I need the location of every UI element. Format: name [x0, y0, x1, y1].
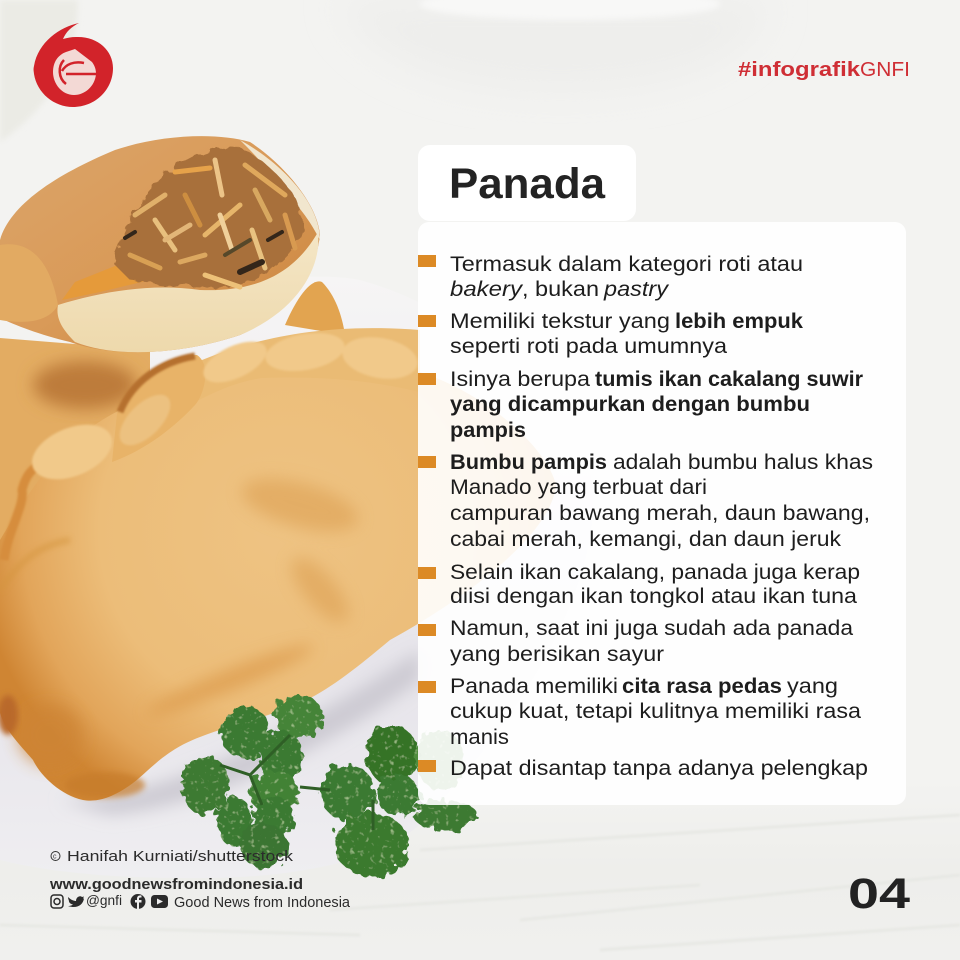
logo — [34, 23, 113, 107]
left fold of top piece — [0, 244, 58, 322]
title panel — [418, 145, 636, 221]
panada: back right piece — [285, 281, 345, 335]
bullet: rasa: Panada memiliki — [450, 675, 618, 698]
bullet: rasa: manis — [450, 726, 509, 749]
fish strands — [125, 160, 295, 287]
bullet: bumbu pampis: Manado yang terbuat dari — [450, 476, 707, 499]
panada: bitten top piece — [0, 136, 320, 352]
bullet: isi: tumis ikan cakalang suwir — [595, 368, 863, 391]
large panada texture — [0, 468, 364, 798]
bullet: pelengkap: Dapat disantap tanpa adanya pelengkap — [450, 757, 868, 780]
filling — [112, 147, 303, 287]
page name: Good News from Indonesia — [174, 894, 351, 911]
bullet: kategori: pastry — [603, 278, 670, 301]
bullet: tekstur: Memiliki tekstur yang — [450, 310, 670, 333]
bullet: kategori: Termasuk dalam kategori roti atau — [450, 253, 803, 276]
upper bread rim — [240, 140, 320, 240]
bullet: sayur: Namun, saat ini juga sudah ada panada — [450, 617, 853, 640]
hashtag — [738, 59, 910, 81]
bullet: bumbu pampis: cabai merah, kemangi, dan daun jeruk — [450, 528, 842, 551]
hashtag: #infografik — [738, 59, 861, 81]
panada: large front — [0, 360, 556, 801]
website: www.goodnewsfromindonesia.id — [49, 876, 303, 893]
panada: back left — [0, 338, 150, 560]
bullet: rasa: cita rasa pedas — [622, 675, 782, 698]
crimp: right side — [195, 328, 420, 402]
bullet: tekstur: seperti roti pada umumnya — [450, 335, 727, 358]
bullet: kategori — [418, 253, 803, 301]
crimped edge of panada — [4, 327, 421, 560]
text panel — [418, 222, 906, 805]
icon: instagram — [51, 895, 63, 908]
bullet: sayur — [418, 617, 853, 666]
plate — [0, 277, 593, 878]
icon: twitter — [68, 896, 84, 907]
blurred bowl top left — [0, 0, 78, 142]
photo credit: Hanifah Kurniati/shutterstock — [67, 848, 294, 865]
bullet: kategori: , bukan — [522, 278, 599, 301]
bullet: isi: yang dicampurkan dengan bumbu — [450, 393, 810, 416]
bullet: bumbu pampis — [418, 451, 873, 551]
plate shadow under panada — [60, 650, 420, 815]
crimp: highlights and shadows — [4, 356, 195, 560]
bullet: sayur: yang berisikan sayur — [450, 643, 664, 666]
logo emblem — [53, 49, 96, 95]
bullet: bumbu pampis: adalah bumbu halus khas — [613, 451, 873, 474]
orange edge under crust — [62, 262, 150, 300]
parsley garnish — [181, 694, 477, 877]
bullet: ikan — [418, 561, 860, 608]
bullet: rasa: yang — [787, 675, 838, 698]
bullet: rasa: cukup kuat, tetapi kulitnya memiliki rasa — [450, 700, 861, 723]
photo credit: c — [53, 854, 57, 860]
title: Panada — [449, 160, 606, 208]
bullet: bumbu pampis: campuran bawang merah, daun bawang, — [450, 502, 870, 525]
bullet: bumbu pampis: Bumbu pampis — [450, 451, 607, 474]
wooden table — [0, 780, 960, 960]
bullet: kategori: bakery — [450, 278, 524, 301]
bullet: tekstur: lebih empuk — [675, 310, 803, 333]
bread crumb — [57, 232, 318, 352]
bullet: ikan: diisi dengan ikan tongkol atau ikan tuna — [450, 585, 857, 608]
handle: @gnfi — [86, 892, 122, 908]
bullet: rasa — [418, 675, 861, 749]
bullet: isi: pampis — [450, 419, 526, 442]
page number: 04 — [848, 870, 910, 918]
blurred dish top centre — [340, 0, 770, 92]
icon: facebook — [130, 894, 146, 909]
crimp: centre — [112, 355, 205, 462]
bullet: isi — [418, 368, 863, 442]
bullet: ikan: Selain ikan cakalang, panada juga kerap — [450, 561, 860, 584]
bullet: isi: Isinya berupa — [450, 368, 590, 391]
icon: youtube — [151, 895, 168, 908]
bullet: tekstur — [418, 310, 803, 358]
hashtag: GNFI — [860, 59, 910, 81]
social row — [51, 892, 351, 911]
